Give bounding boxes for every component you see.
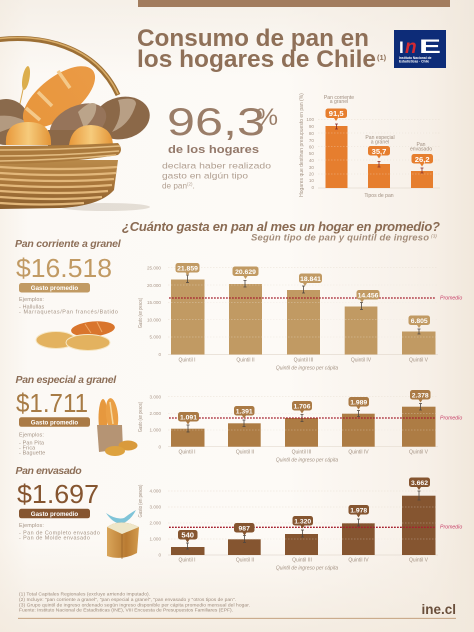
- bars: [171, 280, 436, 354]
- y axis: 2.000: [150, 411, 161, 416]
- title: (1): [377, 53, 387, 62]
- x labels: Quintil de ingreso per cápita: [276, 366, 338, 372]
- logo: INE: n: [405, 37, 417, 58]
- x labels: [179, 358, 429, 372]
- bar chart: corriente: [138, 263, 462, 372]
- x labels: [179, 450, 429, 464]
- callouts: [178, 390, 430, 424]
- examples: - Baguette: [19, 450, 45, 456]
- x labels: Quintil III: [292, 558, 312, 564]
- callouts: [176, 263, 430, 328]
- callouts: 987: [239, 525, 250, 532]
- title: [137, 25, 387, 73]
- callouts: 20.629: [235, 269, 256, 276]
- y axis: 0: [311, 185, 314, 190]
- callout: 26,2: 26,2: [415, 155, 430, 164]
- callouts: 14.456: [358, 292, 379, 299]
- heading: Pan especial a granel: [16, 374, 117, 386]
- panel: pan especial a granel: [16, 374, 462, 464]
- error bars: [335, 124, 424, 173]
- icon: wheat stalk: [19, 66, 32, 108]
- heading: Pan corriente a granel: [15, 238, 122, 250]
- callouts: 540: [181, 530, 194, 539]
- callouts: 1.706: [293, 403, 311, 410]
- illustration: bread basket: [0, 38, 154, 211]
- callouts: 1.391: [236, 408, 253, 415]
- callouts: 3.662: [411, 480, 428, 487]
- footnotes: [19, 592, 250, 614]
- bar chart: envasado: [138, 478, 462, 572]
- statistic description: declara haber realizado: [162, 162, 272, 170]
- y axis: 25.000: [147, 266, 161, 270]
- basket floor shadow: [60, 203, 150, 211]
- callouts: 1.989: [350, 399, 367, 406]
- footnotes: (2) Incluye: "pan corriente a granel", "pan especial a granel", "pan envasado y "otros tipos de pan".: [19, 597, 236, 603]
- callouts: 6.805: [411, 318, 428, 325]
- callouts: 2.378: [412, 392, 429, 399]
- heading: question: (3): [431, 234, 437, 240]
- bar labels: a granel: [371, 140, 389, 146]
- y axis: 50: [309, 151, 314, 156]
- x labels: Quintil de ingreso per cápita: [276, 566, 338, 572]
- average line: Promedio: [440, 416, 462, 422]
- pill: gasto promedio: [19, 509, 90, 518]
- callouts: 1.978: [350, 507, 367, 514]
- average line: Promedio: [440, 296, 462, 302]
- icon: buns: [6, 122, 113, 145]
- y axis: [138, 484, 161, 558]
- y axis: 20: [309, 172, 314, 176]
- error bars: [186, 275, 420, 334]
- callout: 35,7: [368, 146, 390, 158]
- y axis: 30: [309, 165, 314, 170]
- x labels: Quintil IV: [351, 358, 372, 364]
- examples: [19, 297, 118, 316]
- examples: - Pan de Molde envasado: [19, 536, 90, 542]
- y axis: Gasto (en pesos): [138, 484, 144, 518]
- icon: bread: [36, 320, 116, 350]
- logo: INE: Instituto Nacional de: [399, 56, 432, 60]
- callouts: 21.859: [177, 265, 198, 272]
- y axis: 40: [309, 158, 314, 163]
- examples: Ejemplos:: [19, 297, 44, 303]
- footnotes: Fuente: Instituto Nacional de Estadísticas (INE), VIII Encuesta de Presupuestos Familiares (EPF).: [19, 608, 233, 614]
- icon: basket body: [0, 143, 121, 209]
- callouts: 1.320: [294, 518, 311, 525]
- y axis: [138, 266, 161, 357]
- x labels: Quintil II: [236, 358, 255, 364]
- bar labels: Pan especial: [365, 135, 395, 141]
- examples: - Pan de Completo envasado: [19, 530, 100, 536]
- y axis: 70: [309, 138, 314, 143]
- icon: orange loaf: [13, 55, 105, 139]
- y axis: 1.000: [150, 428, 161, 433]
- statistic description: gasto en algún tipo: [162, 172, 249, 180]
- bar labels: Tipos de pan: [364, 193, 394, 199]
- y axis: 0: [158, 444, 161, 449]
- x labels: Quintil II: [236, 558, 254, 564]
- examples: [19, 432, 45, 456]
- callouts: 18.841: [300, 276, 321, 283]
- y axis: Gasto (en pesos): [138, 402, 144, 432]
- heading: question: ¿Cuánto gasta en pan al mes un hogar en promedio?: [122, 219, 440, 234]
- y axis: 3.000: [150, 394, 161, 400]
- bar chart: especial: [138, 390, 462, 464]
- y axis: 0: [158, 352, 161, 357]
- icon: left dark bread: [0, 99, 29, 145]
- y axis: 2.000: [150, 520, 161, 526]
- statistic description: [162, 162, 272, 190]
- top band: [138, 0, 450, 7]
- bars: [171, 407, 436, 447]
- x labels: Quintil I: [179, 358, 195, 364]
- x labels: Quintil IV: [348, 450, 369, 456]
- bar chart: tipos de pan: [299, 93, 440, 199]
- y axis: 20.000: [147, 283, 161, 288]
- bar labels: [324, 95, 432, 199]
- x labels: Quintil de ingreso per cápita: [276, 458, 338, 464]
- bars: [326, 126, 433, 188]
- title: Consumo de pan en: [137, 25, 369, 52]
- y axis: 10.000: [147, 318, 161, 322]
- statistic: 96,3%: de los hogares: [168, 144, 259, 156]
- big value: $16.518: [16, 253, 112, 283]
- y axis: 5.000: [150, 334, 161, 340]
- pill: gasto promedio: [19, 417, 90, 427]
- statistic description: .: [193, 182, 195, 190]
- y axis: Hogares que destinan presupuesto en pan (%): [299, 93, 305, 197]
- statistic description: (2): [187, 182, 193, 186]
- icon: packaged bread: [106, 510, 139, 559]
- y axis: [299, 93, 314, 197]
- x labels: Quintil I: [179, 558, 195, 564]
- icon: brown loaves: [43, 92, 154, 153]
- bar labels: Pan corriente: [324, 95, 354, 101]
- panel: pan envasado: [16, 465, 462, 572]
- x labels: Quintil III: [292, 450, 311, 456]
- y axis: 1.000: [150, 536, 161, 542]
- y axis: 3.000: [150, 504, 161, 510]
- big value: $1.697: [17, 479, 99, 509]
- pill: gasto promedio: Gasto promedio: [31, 419, 78, 426]
- y axis: 4.000: [150, 488, 161, 494]
- x labels: Quintil I: [179, 450, 195, 456]
- examples: - Frica: [19, 446, 35, 452]
- y axis: 100: [306, 117, 314, 122]
- icon: basket handle: [0, 38, 118, 95]
- callout: 35,7: 35,7: [372, 147, 386, 156]
- x labels: Quintil V: [409, 450, 429, 456]
- big value: $1.711: [16, 388, 88, 418]
- x labels: Quintil IV: [348, 558, 369, 564]
- y axis: 80: [309, 131, 314, 136]
- pill: gasto promedio: Gasto promedio: [31, 511, 78, 518]
- examples: [19, 523, 100, 542]
- pill: gasto promedio: Gasto promedio: [31, 285, 78, 292]
- y axis: 60: [309, 144, 314, 150]
- statistic description: de pan: [162, 182, 187, 190]
- icon: baguettes in bag: [97, 397, 138, 456]
- logo: INE: Estadísticas · Chile: [399, 60, 429, 64]
- x labels: Quintil V: [409, 358, 429, 364]
- examples: - Pan Pita: [19, 440, 44, 446]
- callout: 26,2: [412, 154, 433, 166]
- statistic: 96,3%: 96,3: [167, 101, 265, 144]
- bar labels: envasado: [410, 146, 432, 152]
- logo: INE: I: [399, 38, 404, 57]
- callout: 91,5: [326, 108, 347, 121]
- footnotes: (3) Grupo quintil de ingreso ordenado según ingreso disponible per cápita promedio mensual del hogar.: [19, 602, 250, 608]
- statistic: 96,3%: [167, 101, 278, 156]
- y axis: [138, 394, 161, 449]
- callout: 91,5: 91,5: [329, 109, 344, 118]
- y axis: 10: [309, 178, 314, 183]
- heading: Pan envasado: [16, 465, 82, 477]
- callouts: 1.091: [180, 414, 197, 421]
- error bars: [186, 491, 420, 549]
- heading: question: Según tipo de pan y quintil de ingreso: [251, 232, 429, 244]
- callouts: [178, 478, 430, 542]
- examples: Ejemplos:: [19, 523, 44, 529]
- footnotes: (1) Total Capitales Regionales (excluye arriendo imputado).: [19, 592, 150, 598]
- x labels: Quintil III: [294, 358, 313, 364]
- bar labels: Pan: [416, 142, 426, 148]
- panel: pan corriente a granel: [15, 238, 462, 372]
- y axis: 15.000: [147, 300, 161, 305]
- website: ine.cl: ine.cl: [422, 601, 456, 617]
- examples: - Marraquetas/Pan francés/Batido: [19, 310, 118, 316]
- pill: gasto promedio: [19, 283, 90, 292]
- heading: question: [122, 219, 440, 244]
- y axis: Gasto (en pesos): [138, 298, 144, 328]
- title: los hogares de Chile: [137, 46, 376, 73]
- bars: [171, 496, 436, 555]
- x labels: Quintil II: [236, 450, 254, 456]
- examples: - Hallullas: [19, 304, 44, 310]
- logo: INE: E: [419, 37, 441, 58]
- error bars: [186, 404, 422, 432]
- x labels: [179, 558, 429, 572]
- examples: Ejemplos:: [19, 432, 44, 438]
- logo: INE: [394, 30, 446, 68]
- x labels: Quintil V: [409, 558, 429, 564]
- statistic: 96,3%: %: [256, 104, 278, 131]
- bar labels: a granel: [330, 99, 348, 105]
- average line: Promedio: [440, 524, 462, 530]
- y axis: 90: [309, 124, 314, 129]
- y axis: 0: [158, 552, 161, 558]
